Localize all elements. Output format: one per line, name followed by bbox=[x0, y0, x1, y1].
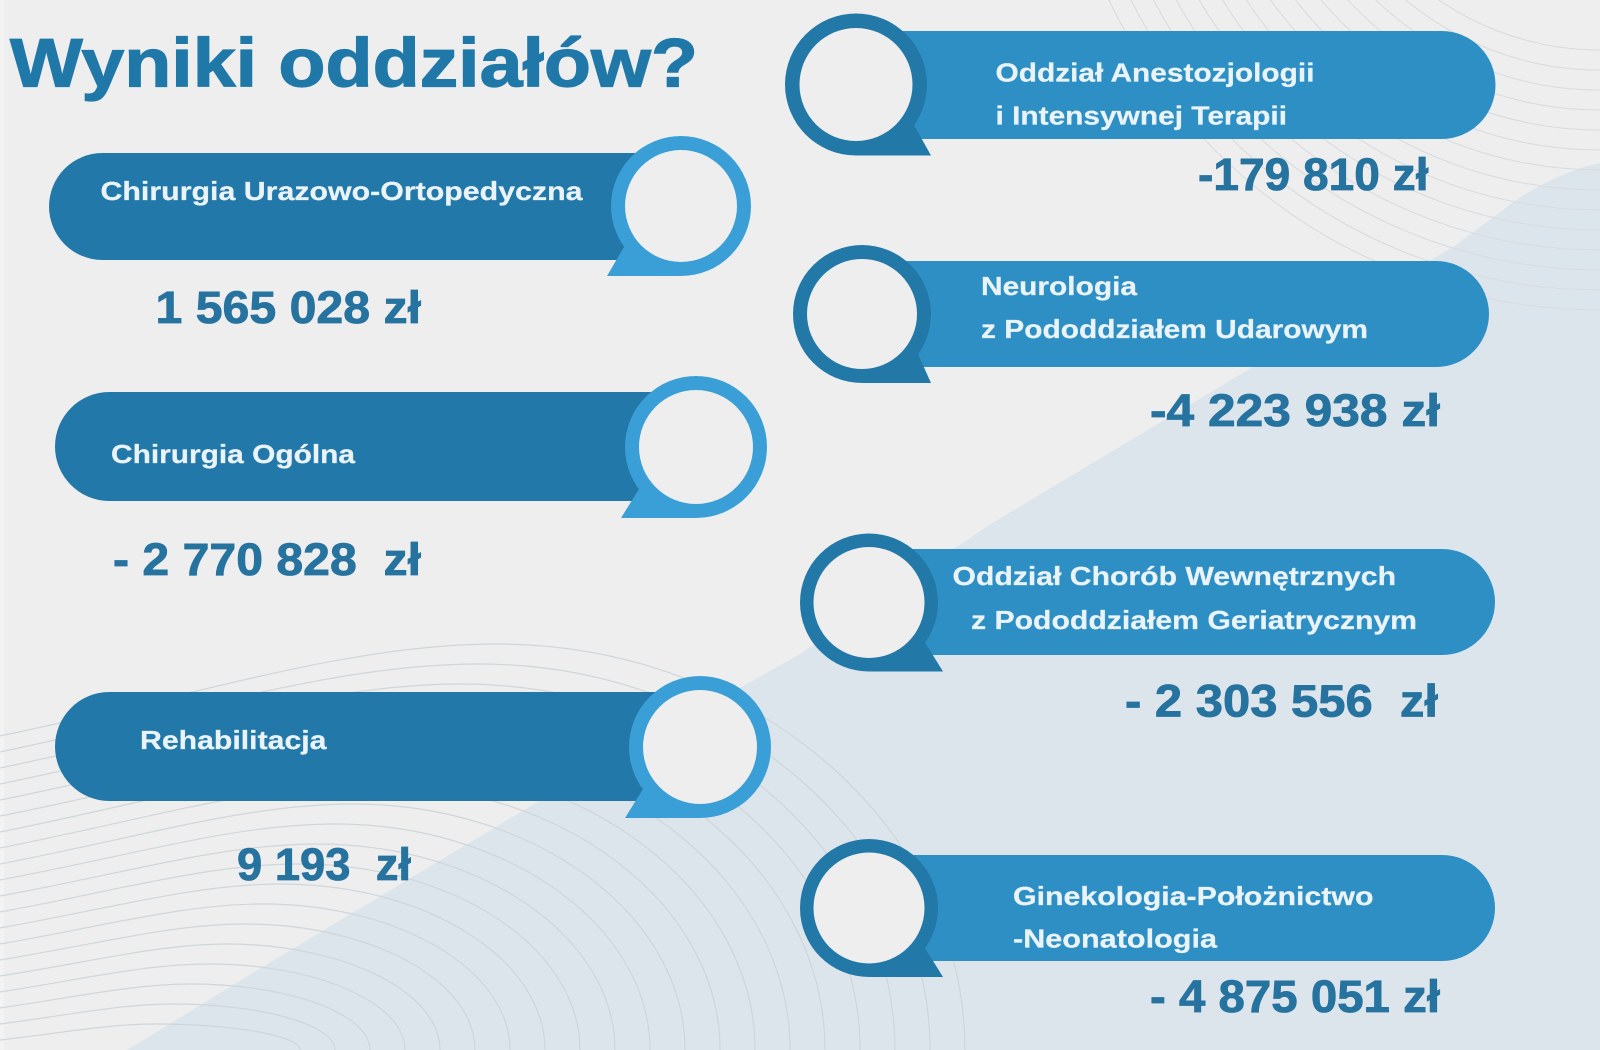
department name: Oddział Chorób Wewnętrznych bbox=[952, 561, 1396, 591]
result value: -4 223 938 zł bbox=[1150, 385, 1441, 436]
department name: Oddział Anestozjologii bbox=[996, 58, 1314, 88]
panel: Chirurgia Urazowo-Ortopedyczna bbox=[49, 136, 751, 333]
label pill bbox=[49, 153, 681, 260]
department name: Chirurgia Ogólna bbox=[111, 439, 356, 469]
result value: - 2 770 828 zł bbox=[113, 534, 422, 585]
panel: Chirurgia Ogólna bbox=[55, 376, 767, 585]
title: Wyniki oddziałów? bbox=[10, 24, 698, 102]
department name, second line: -Neonatologia bbox=[1013, 924, 1218, 954]
department name: Chirurgia Urazowo-Ortopedyczna bbox=[100, 176, 583, 206]
label pill bbox=[862, 261, 1489, 367]
result value: - 2 303 556 zł bbox=[1125, 676, 1439, 726]
label pill bbox=[869, 855, 1495, 961]
panel: Neurologia z Pododdziałem Udarowym bbox=[793, 245, 1489, 436]
result value: - 4 875 051 zł bbox=[1150, 971, 1441, 1022]
icon: speech bubble ring bbox=[607, 136, 751, 276]
result value: 9 193 zł bbox=[237, 839, 411, 890]
department name, second line: z Pododdziałem Udarowym bbox=[981, 314, 1368, 344]
icon: speech bubble ring bbox=[621, 376, 767, 518]
department name: Ginekologia-Położnictwo bbox=[1013, 881, 1374, 911]
panel: Rehabilitacja bbox=[55, 676, 771, 890]
department name: Rehabilitacja bbox=[140, 725, 327, 755]
icon: speech bubble ring bbox=[793, 245, 931, 383]
icon: speech bubble ring bbox=[785, 14, 931, 156]
department name: Neurologia bbox=[981, 271, 1138, 301]
department name, second line: z Pododdziałem Geriatrycznym bbox=[971, 605, 1417, 635]
icon: speech bubble ring bbox=[800, 534, 943, 672]
result value: -179 810 zł bbox=[1198, 149, 1429, 200]
panel: Ginekologia-Położnictwo-Neonatologia bbox=[800, 839, 1495, 1022]
department name, second line: i Intensywnej Terapii bbox=[996, 100, 1287, 130]
icon: speech bubble ring bbox=[800, 839, 943, 977]
panel: Oddział Anestezjologii i Intensywnej Terapii bbox=[785, 14, 1496, 200]
label pill bbox=[55, 692, 700, 801]
icon: speech bubble ring bbox=[625, 676, 771, 818]
label pill bbox=[55, 392, 696, 501]
result value: 1 565 028 zł bbox=[156, 282, 422, 333]
panel: Oddział Chorób Wewnętrznych z Pododdziałem Geriatrycznym bbox=[800, 534, 1495, 726]
label pill bbox=[869, 549, 1495, 655]
label pill bbox=[856, 31, 1496, 139]
